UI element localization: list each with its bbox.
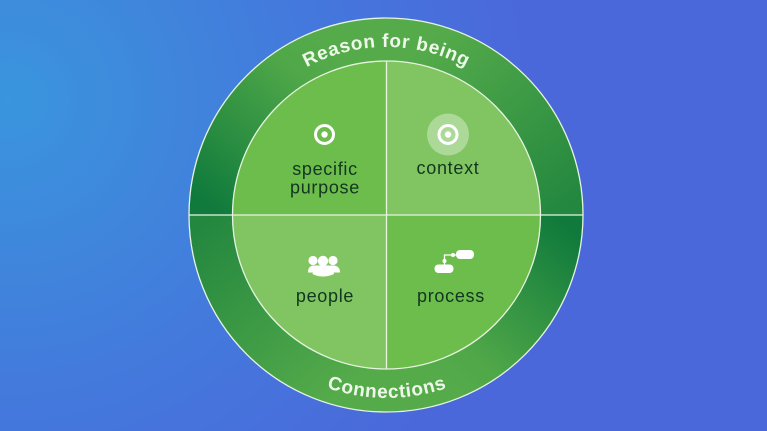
icon: target, specific purpose — [316, 126, 334, 144]
icon: process flow — [434, 250, 474, 273]
panel: context quadrant — [386, 61, 540, 215]
text: specific purpose: specific — [292, 159, 358, 179]
text: context: context — [417, 158, 479, 178]
diagram: purpose circle — [188, 17, 584, 413]
outer ring: top half — [189, 18, 583, 215]
panel: specific purpose quadrant — [232, 61, 386, 215]
text: specific purpose: purpose — [290, 178, 360, 198]
curved heading: Connections: Connections — [328, 376, 446, 398]
icon: target with halo, context — [427, 114, 469, 156]
circle outlines and dividers — [189, 18, 583, 412]
outer ring: bottom half — [189, 215, 583, 412]
panel: process quadrant — [386, 215, 540, 369]
text: people: people — [296, 286, 354, 306]
curved heading: Reason for being: Reason for being — [302, 33, 469, 68]
icon: people — [308, 256, 340, 276]
text: process: process — [417, 286, 485, 306]
panel: people quadrant — [232, 215, 386, 369]
